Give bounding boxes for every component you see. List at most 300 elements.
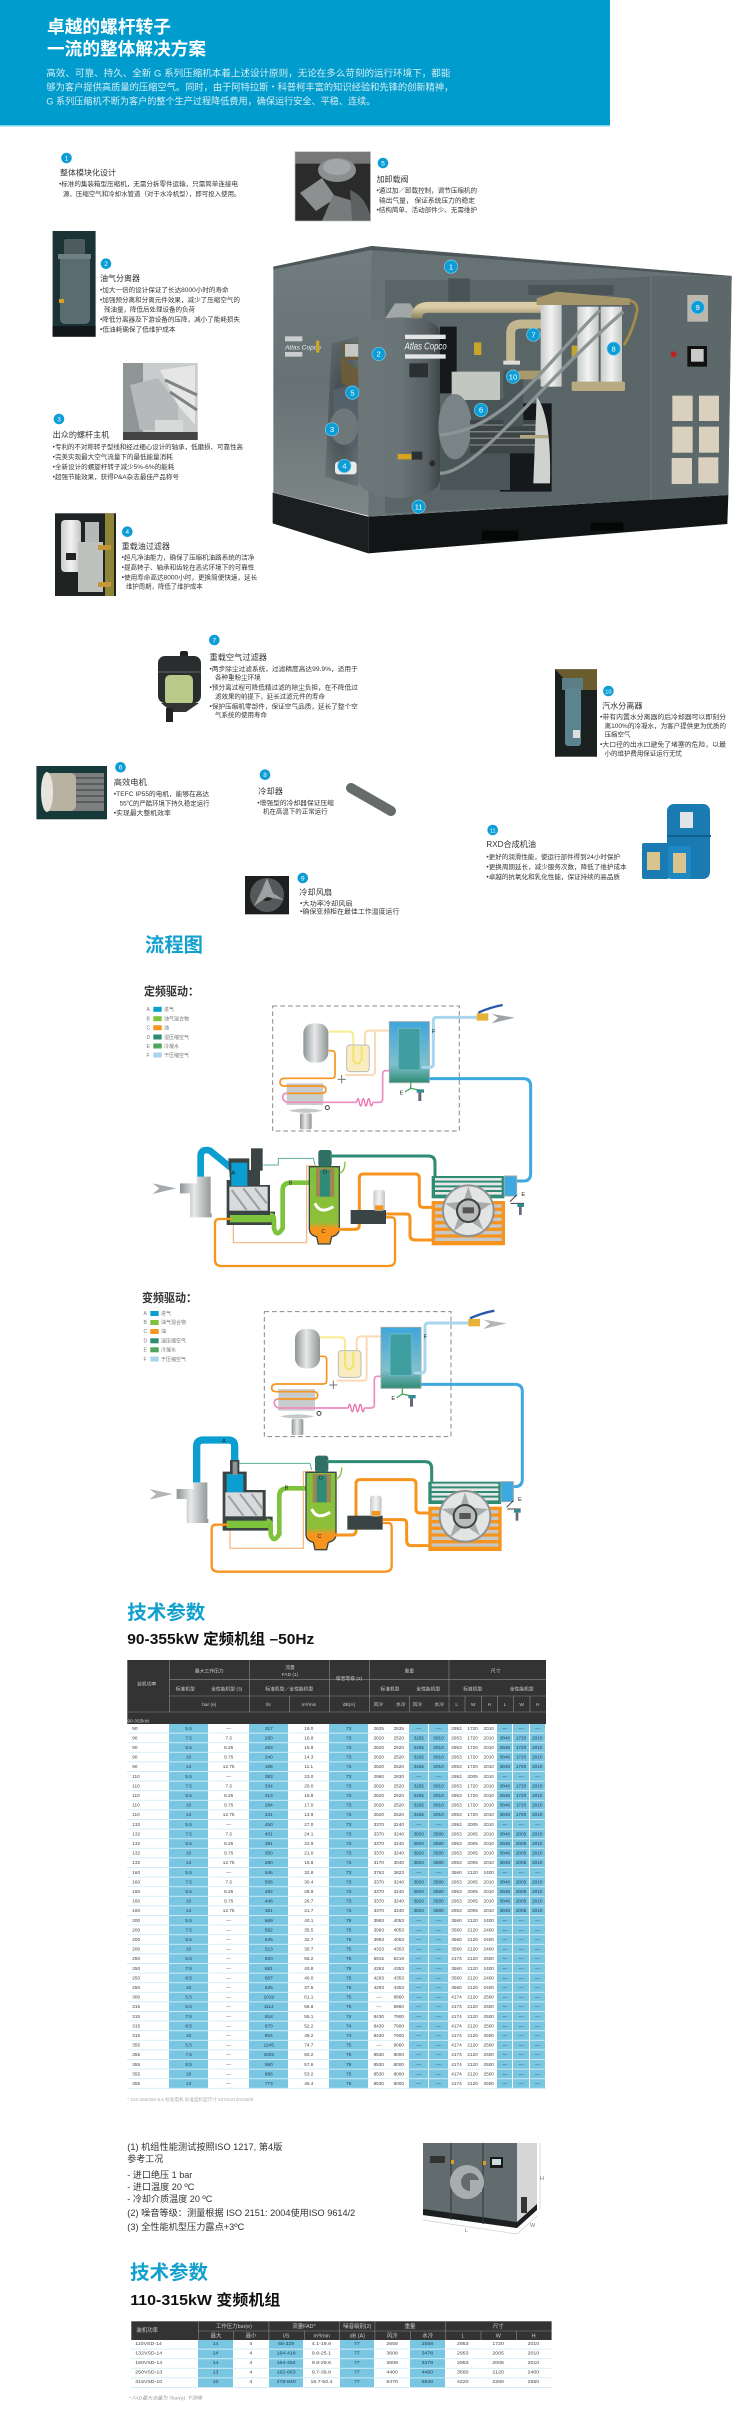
feature 1: modular design: 源、压缩空气和冷却水管道（对于水冷机型），即可投入使用。 [63, 189, 240, 198]
table 1 body: — [226, 1995, 231, 2000]
compressor circuit: C [317, 1534, 321, 1540]
table 1 body: 3370 [374, 1841, 384, 1846]
subheading: 110-315kW: 110-315kW 变频机组 [130, 2291, 280, 2309]
table 1 body: — [502, 2043, 507, 2048]
table 2 body: 3608 [386, 2360, 398, 2366]
table 1 body: 1720 [467, 1745, 478, 1750]
table 1 body: 2120 [467, 2081, 478, 2086]
table 2 body: 6540 [422, 2380, 433, 2385]
table 1 body: — [416, 2081, 421, 2086]
table 1 body: 90 [132, 1736, 138, 1741]
table 1 body: 3010 [433, 1793, 444, 1798]
table 1 body: — [226, 1822, 231, 1827]
flow diagram: fixed speed: C [321, 1229, 325, 1235]
table 1 body: — [416, 1870, 421, 1875]
feature 5: unloading valve: 5 [381, 160, 385, 167]
table 1 body: 3560 [451, 1870, 462, 1875]
table 1 body: 8530 [374, 2072, 384, 2077]
table 1 body: — [535, 1870, 540, 1875]
table 1 body: 381 [265, 1841, 273, 1846]
table 1 body: 231 [265, 1813, 273, 1817]
table 1 body: 7900 [394, 2033, 404, 2038]
table 1 body: — [226, 1947, 231, 1952]
table 1 body: 73 [346, 1736, 351, 1741]
table 1 body: 2620 [374, 1736, 384, 1741]
table 1 body: 773 [265, 2081, 273, 2086]
table 1 body: 1245 [264, 2043, 274, 2048]
table 1 body: — [519, 1995, 523, 2000]
table 1 body: 200 [132, 1928, 140, 1933]
table 1 header: 标准机型 [463, 1686, 482, 1692]
notes: (1) 机组性能测试按照ISO 1217, 第4版 [127, 2141, 282, 2152]
table 1 body: 9.75 [224, 1851, 233, 1856]
table 1 body: — [502, 1985, 507, 1990]
table 1 body: — [226, 2062, 231, 2067]
table 1 body: 804 [265, 2033, 273, 2038]
table 2 body: 4 [249, 2380, 252, 2385]
table 1 body: 90 [132, 1755, 138, 1760]
table 1 body: 2620 [374, 1745, 384, 1750]
machine base [273, 493, 368, 553]
table 1 body: 7.5 [185, 1966, 192, 1971]
table 1 body: 2010 [532, 1880, 543, 1885]
table 1 body: 1720 [516, 1784, 526, 1789]
table 2 body: 164-418 [277, 2351, 296, 2357]
table 1 body: 4053 [394, 1928, 404, 1933]
table 1 body: 3560 [451, 1918, 462, 1923]
table 1 body: 450 [265, 1822, 273, 1827]
flow diagram: variable speed [149, 1311, 522, 1572]
table 1 body: 10 [186, 1755, 191, 1760]
table 1 body: 75 [346, 1937, 351, 1942]
discharge pipes [417, 307, 547, 318]
table 1 body: — [436, 2033, 441, 2038]
table 1 body: 2500 [483, 2024, 494, 2029]
banner text: 高效、可靠、持久、全新 G 系列压缩机本着上述设计原则，无论在多么苛刻的运行环境下，都能 [46, 68, 451, 79]
table 1 header: l/s [266, 1702, 271, 1708]
table 1 body: 334 [265, 1784, 273, 1789]
feature 3: screw element: 出众的螺杆主机 [53, 430, 109, 440]
flow diagram: fixed speed: D [323, 1170, 327, 1176]
table 1 body: 2005 [516, 1832, 526, 1837]
main compressor illustration: 10 [509, 372, 517, 381]
table 1 body: 2120 [467, 1918, 478, 1923]
table 1 body: 9.75 [224, 1803, 233, 1808]
feature 6: motor: 55℃的严酷环境下持久稳定运行 [120, 798, 210, 808]
table 1 body: 132 [132, 1851, 140, 1856]
table 1 body: 14 [186, 1909, 191, 1913]
table 2 body: 4 [249, 2341, 252, 2347]
table 1 body: 132 [132, 1841, 140, 1846]
table 1 body: 2005 [467, 1832, 478, 1837]
table 1 body: 3846 [500, 1736, 510, 1741]
main compressor illustration: 9 [696, 303, 700, 312]
feature 7: air filter: •保护压缩机零部件，保证空气品质，延长了整个空 [210, 701, 358, 710]
table 2 body: 4 [249, 2351, 252, 2357]
table 1 body: — [502, 2072, 507, 2077]
table 1 body: 75 [346, 2005, 351, 2009]
table 2 header: 水冷 [422, 2332, 434, 2340]
table 1 body: 73 [346, 1755, 351, 1760]
compressor circuit [153, 1148, 524, 1266]
feature 9: cooling fan [245, 873, 400, 916]
table 1 body: 28.9 [304, 1889, 313, 1894]
table 1 body: 2953 [451, 1803, 462, 1808]
table 1 body: 315 [132, 2033, 140, 2038]
table 1 body: 2500 [483, 2072, 494, 2077]
table 1 body: 66.8 [304, 2005, 313, 2009]
table 1 body: 355 [132, 2053, 140, 2057]
table 1 body: — [226, 2014, 231, 2019]
legend: variable speed: 冷凝水 [161, 1346, 176, 1354]
photo: fan [245, 876, 289, 914]
table 1 body: — [535, 2033, 540, 2038]
flow diagram: fixed speed [153, 1005, 531, 1266]
table 1 body: 2120 [467, 2005, 478, 2009]
table 1 body: 3920 [413, 1909, 424, 1913]
table 1 body: 3920 [413, 1841, 424, 1846]
table 1 body: 14 [186, 1765, 191, 1769]
main compressor illustration: 7 [531, 330, 535, 339]
main compressor illustration: 6 [479, 406, 483, 415]
table 1 body: 1720 [467, 1793, 478, 1798]
table 1 body: 1720 [467, 1755, 478, 1760]
feature 7: air filter: •两步除尘过滤系统，过滤精度高达99.9%，适用于 [210, 664, 358, 673]
table 1 body: — [519, 1937, 523, 1942]
table 1 body: 3560 [451, 1947, 462, 1952]
notes: - 冷却介质温度 20 ºC [127, 2193, 213, 2204]
feature 3: screw element: •专利的不对称转子型线和经过细心设计的轴承，低磨损、可靠性高 [53, 442, 243, 451]
table 1 body: — [519, 1966, 523, 1971]
table 1 body: 73 [346, 1745, 351, 1750]
feature 10: water separator [555, 669, 727, 757]
table 1 body: — [416, 1985, 421, 1990]
table 1 body: 263 [265, 1745, 273, 1750]
table 1 body: 1720 [467, 1726, 478, 1731]
table 1 body: 3846 [500, 1765, 510, 1769]
table 1 body: 592 [265, 1928, 273, 1933]
feature 2: oil separator: 油气分离器 [100, 273, 140, 283]
table 1 body: — [535, 1976, 540, 1981]
table 1 body: 3240 [394, 1841, 404, 1846]
table 1 body: 160 [132, 1899, 140, 1904]
table 1 body: 2520 [394, 1755, 404, 1760]
table 1 body: 2953 [451, 1889, 462, 1894]
table 1 body: 3560 [451, 1966, 462, 1971]
table 1 body: 3240 [394, 1899, 404, 1904]
table 1 body: 1114 [264, 2005, 274, 2009]
table 1 body: — [436, 1966, 441, 1971]
table 1 body: 3920 [413, 1861, 424, 1865]
table 1 body: 4353 [394, 1947, 404, 1952]
table 1 body: — [502, 1918, 507, 1923]
table 1 body: 3010 [433, 1803, 444, 1808]
table 1 body: — [416, 1822, 421, 1827]
table 1 body: 19.0 [304, 1726, 313, 1731]
table 1 body: 12.75 [223, 1909, 234, 1913]
feature 6: motor: •实现最大整机效率 [114, 808, 171, 817]
table 1 body: 73 [346, 1841, 351, 1846]
table 1 body: — [416, 1937, 421, 1942]
table 2 body: 2280 [492, 2380, 504, 2385]
table 1 body: 355 [132, 2062, 140, 2067]
table 2 body: 10 [213, 2380, 218, 2385]
table 1 body: — [416, 1726, 421, 1731]
flow diagram: fixed speed: B [289, 1181, 293, 1187]
table 1 body: 4353 [394, 1985, 404, 1990]
table 1 body: 361 [265, 1909, 273, 1913]
table 1 body: 3165 [413, 1755, 424, 1760]
table 2 body: 4 [249, 2370, 252, 2376]
table 1 body: 3370 [374, 1880, 384, 1885]
feature 4: oil filter: 维护周期，降低了维护成本 [126, 581, 203, 590]
table 2 body: 2010 [528, 2341, 539, 2347]
table 2 body: 16.7-50.4 [310, 2380, 332, 2385]
legend: fixed speed [146, 1006, 189, 1059]
table 1 body: 4174 [451, 2033, 462, 2038]
table 1 body: 8.25 [224, 1889, 233, 1894]
table 2 header: H [532, 2334, 536, 2340]
table 1 body: — [436, 2072, 441, 2077]
table 1 body: 8.25 [224, 1793, 233, 1798]
table 1 body: 2120 [467, 1870, 478, 1875]
table 1 body: 3823 [394, 1870, 404, 1875]
feature 7: air filter [158, 635, 359, 722]
table 1 body: 7.5 [185, 1832, 192, 1837]
table 1 body: 2535 [394, 1726, 404, 1731]
table 2 body: 4460 [422, 2370, 433, 2376]
table 2 body: 164-494 [277, 2360, 296, 2366]
heading: variable speed: 变频驱动： [142, 1290, 197, 1305]
table 1 body: 18.8 [304, 1793, 313, 1798]
photo: water separator [555, 669, 597, 757]
table 1 body: 90 [132, 1726, 138, 1731]
table 1 body: 2005 [516, 1861, 526, 1865]
feature 4: oil filter: 重载油过滤器 [122, 541, 170, 551]
flow diagram: fixed speed: F [432, 1029, 436, 1035]
table 2 body: 2658 [386, 2341, 398, 2347]
table 1 body: 8430 [374, 2033, 384, 2038]
table 1 footnote: * 315-355/250-5.5 标准电机 标准型机型尺寸 5374x2120x2500 [127, 2096, 254, 2103]
table 1 body: 667 [265, 1976, 273, 1981]
table 2 body: 77 [354, 2360, 360, 2366]
table 1 body: — [502, 1928, 507, 1933]
table 1 body: 23.0 [304, 1774, 313, 1779]
table 1 body: 3165 [413, 1745, 424, 1750]
table 1 body: — [535, 1928, 540, 1933]
table 1 body: 8530 [374, 2081, 384, 2086]
table 1 body: 110 [132, 1774, 140, 1779]
legend: variable speed: 湿压缩空气 [161, 1338, 186, 1344]
table 1 body: — [535, 2053, 540, 2057]
table 1 body: — [502, 2005, 507, 2009]
table 1 body: 3560 [451, 1928, 462, 1933]
table 1 body: 350 [265, 1851, 273, 1856]
table 1 body: — [535, 2062, 540, 2067]
feature 10: water separator: •大口径的出水口避免了堵塞的危险，以最 [600, 740, 727, 749]
table 1 body: 48.2 [304, 2033, 313, 2038]
table 1 body: 2500 [483, 2053, 494, 2057]
table 1 body: 2120 [467, 2033, 478, 2038]
table 1 body: 3920 [413, 1889, 424, 1894]
table 1 body: 11.1 [304, 1765, 313, 1769]
table 1 body: — [416, 2072, 421, 2077]
table 1 body: 3370 [374, 1822, 384, 1827]
legend: fixed speed: D [146, 1035, 150, 1041]
table 1 body: 9.75 [224, 1899, 233, 1904]
table 1 body: 2830 [394, 1774, 404, 1779]
table 1 body: — [519, 2081, 523, 2086]
feature 8: cooler [257, 769, 391, 816]
table 1 body: 8000 [394, 2081, 404, 2086]
table 1 body: 315 [132, 2024, 140, 2029]
table 1 body: 4174 [451, 2043, 462, 2048]
table 1 header: 尺寸 [491, 1668, 501, 1674]
table 1 body: — [436, 1947, 441, 1952]
table 1 body: 73 [346, 1784, 351, 1789]
table 1 body: 2005 [516, 1880, 526, 1885]
heading: flow chart: 流程图 [145, 934, 203, 956]
table 1 body: 160 [132, 1889, 140, 1894]
table 1 body: 10 [186, 1985, 191, 1990]
table 1 body: — [502, 1822, 507, 1827]
table 1 body: 2520 [394, 1784, 404, 1789]
table 1 body: — [502, 2053, 507, 2057]
table 1 body: 160 [132, 1909, 140, 1913]
table 1 body: 2005 [467, 1822, 478, 1827]
table 1 body: 7.3 [225, 1880, 232, 1885]
table 1 header: 90-355kW [127, 1718, 150, 1724]
table 1 body: — [502, 2014, 507, 2019]
table 2 header: m³/min [313, 2334, 330, 2340]
table 1 body: 3010 [433, 1736, 444, 1741]
air cooler cylinders [541, 302, 562, 387]
main compressor illustration: 3 [330, 425, 334, 434]
table 1 body: 2120 [467, 1995, 478, 2000]
table 1 body: 5.5 [185, 1957, 192, 1961]
table 1 body: 1720 [516, 1765, 526, 1769]
table 1 body: 185 [265, 1765, 273, 1769]
table 1 body: 3580 [433, 1899, 444, 1904]
table 1 body: 2010 [483, 1909, 494, 1913]
table 1 body: — [416, 2053, 421, 2057]
table 1 body: 30.4 [304, 1880, 313, 1885]
table 1 body: 4174 [451, 2014, 462, 2019]
table 1 body: 2010 [532, 1784, 543, 1789]
table 1 body: 4174 [451, 2024, 462, 2029]
table 1 body: 3846 [500, 1832, 510, 1837]
table 1 body: 317 [265, 1726, 273, 1731]
table 1 body: 2010 [532, 1736, 543, 1741]
table 1 body: 315 [132, 2005, 140, 2009]
feature 2: oil separator: •加强预分离和分离元件效果，减少了压缩空气的 [100, 295, 240, 304]
table 1 body: — [226, 1976, 231, 1981]
table 1 body: 2010 [532, 1745, 543, 1750]
table 1 body: — [519, 2024, 523, 2029]
table 1 body: 8000 [394, 2053, 404, 2057]
feature 10: water separator: 压缩空气 [605, 730, 631, 739]
feature 11: synthetic oil: RXD合成机油 [486, 839, 536, 849]
table 1 body: 7.5 [185, 1928, 192, 1933]
table 1 body: — [502, 1937, 507, 1942]
table 1 body: 3580 [433, 1841, 444, 1846]
table 2 body: 77 [354, 2380, 360, 2385]
table 1 body: 2120 [467, 2053, 478, 2057]
feature 11: synthetic oil [486, 804, 711, 881]
table 1 body: — [519, 1870, 523, 1875]
table 1 body: 75 [346, 1966, 351, 1971]
table 1 header: 全性能机型 [510, 1686, 534, 1692]
feature 2: oil separator: •低油耗确保了低维护成本 [100, 324, 176, 334]
table 1 body: 8.5 [185, 1937, 192, 1942]
table 1 body: 250 [132, 1957, 140, 1961]
table 1 body: 401 [265, 1832, 273, 1837]
table 2 body: 3608 [386, 2351, 398, 2357]
table 1 body: 7.5 [185, 2053, 192, 2057]
table 1 body: — [519, 2043, 523, 2048]
compressor circuit: A [222, 1438, 226, 1444]
table 1 body: — [502, 1947, 507, 1952]
table 1 body: 53.2 [304, 2072, 313, 2077]
table 1 body: — [502, 2081, 507, 2086]
table 1 body: 2010 [532, 1755, 543, 1760]
table 2 body: 4400 [386, 2370, 398, 2376]
table 1 body: 2010 [532, 1851, 543, 1856]
table 1 body: 250 [132, 1976, 140, 1981]
table 1 body: — [502, 1976, 507, 1981]
feature 7: air filter: 气系统的使用寿命 [215, 710, 268, 719]
table 1 body: — [226, 2043, 231, 2048]
photo: valve [295, 152, 370, 221]
table 1 body: 3165 [413, 1803, 424, 1808]
table 1 header: FAD (1) [282, 1672, 299, 1678]
table 1 body: 3370 [374, 1889, 384, 1894]
feature 5: unloading valve: •结构简单、活动部件少、无需维护 [376, 205, 477, 214]
table 1 body: 26.7 [304, 1899, 313, 1904]
table 1 body: 40.8 [304, 1966, 313, 1971]
compressor circuit [149, 1438, 522, 1572]
table 1 body: 75 [346, 2072, 351, 2077]
table 1 body: — [535, 2014, 540, 2019]
table 1 body: 2010 [483, 1841, 494, 1846]
table 1 body: 6915 [374, 1957, 384, 1961]
table 1 body: 446 [265, 1899, 273, 1904]
table 1 body: 3370 [374, 1851, 384, 1856]
table 1 body: 1720 [467, 1736, 478, 1741]
table 1 body: 74 [346, 2014, 351, 2019]
notes: - 进口绝压 1 bar [127, 2169, 192, 2180]
table 1 body: 73 [346, 1851, 351, 1856]
table 1 body: 2120 [467, 1947, 478, 1952]
table 1 body: 17.0 [304, 1803, 313, 1808]
feature 11: synthetic oil: 11 [490, 828, 496, 834]
table 1 body: 3580 [433, 1909, 444, 1913]
table 1 body: 669 [265, 1918, 273, 1923]
feature 8: cooler: 机在高温下的正常运行 [263, 806, 328, 816]
table 1 body: — [226, 2081, 231, 2086]
table 1 body: 3846 [500, 1851, 510, 1856]
table 1 body: 1720 [467, 1784, 478, 1789]
table 1 body: — [226, 2053, 231, 2057]
legend: fixed speed: 湿压缩空气 [164, 1034, 189, 1041]
legend: variable speed: F [144, 1357, 147, 1363]
table 1 body: 3846 [500, 1793, 510, 1798]
table 1 body: — [416, 2024, 421, 2029]
table 1 body: 2953 [451, 1793, 462, 1798]
notes: (3) 全性能机型压力露点+3ºC [127, 2221, 245, 2232]
table 1 body: 2620 [374, 1793, 384, 1798]
table 1 body: — [376, 2043, 381, 2048]
